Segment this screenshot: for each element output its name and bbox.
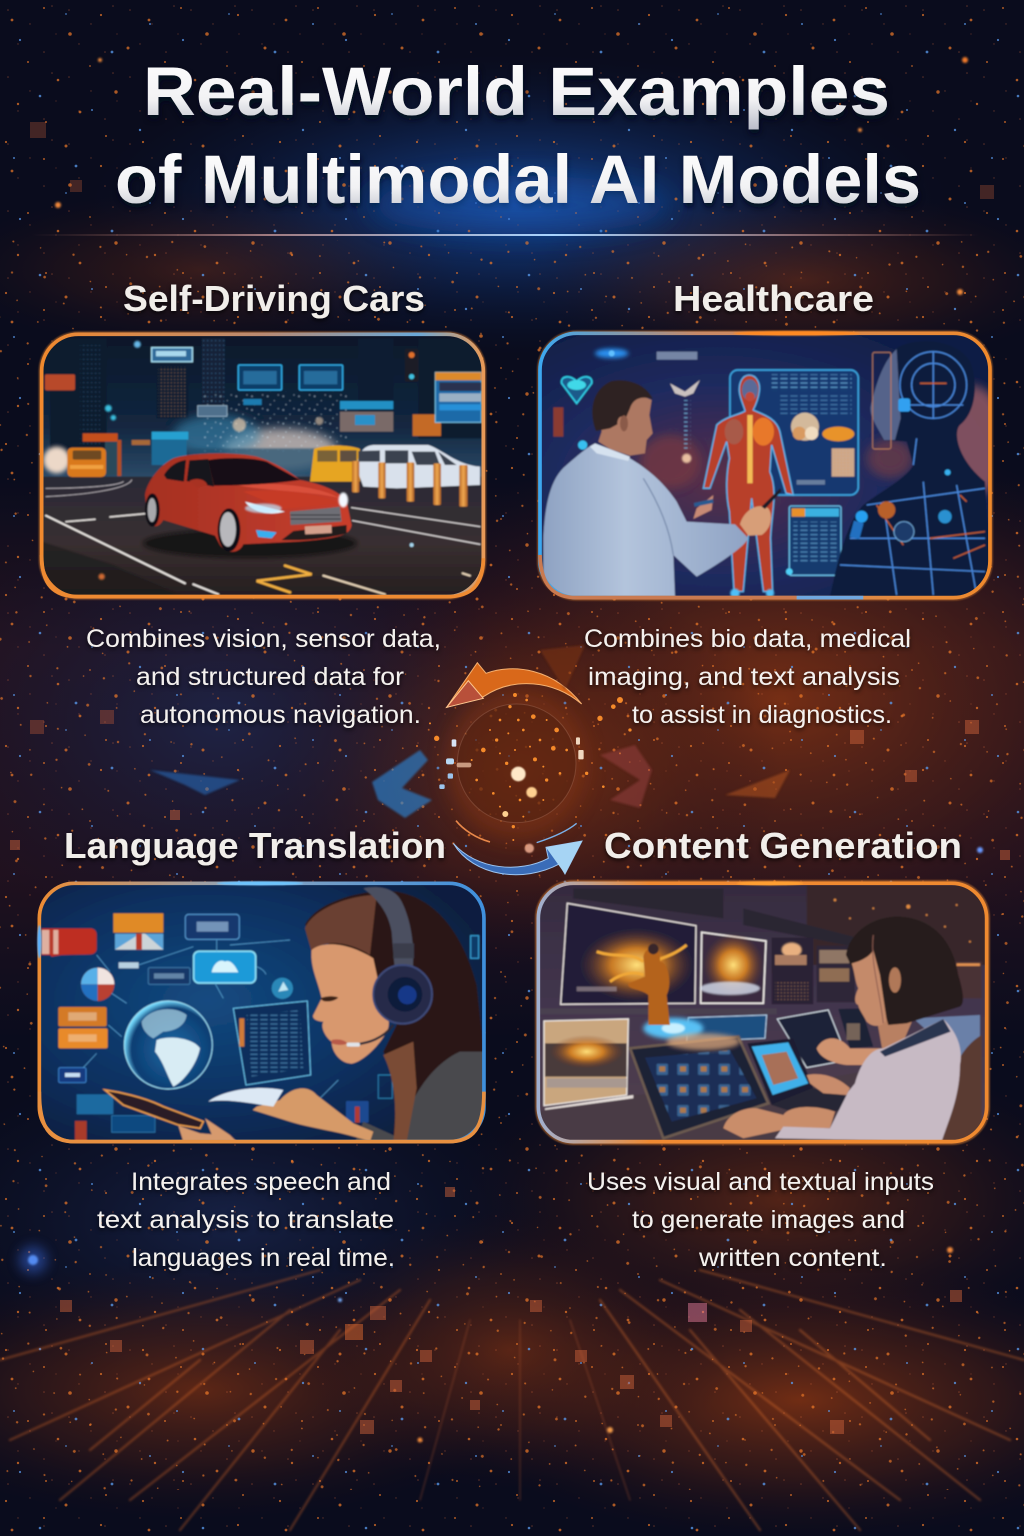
title: [115, 53, 921, 231]
caption: language translation: text analysis to translate: [97, 1206, 394, 1234]
panel: healthcare: [537, 278, 1007, 729]
caption: self-driving cars: [86, 625, 441, 729]
caption: healthcare: Combines bio data, medical: [584, 625, 911, 653]
heading: healthcare: Healthcare: [673, 278, 874, 319]
panel: content generation: [537, 825, 990, 1272]
caption: self-driving cars: and structured data for: [136, 663, 404, 691]
heading: language translation: Language Translation: [64, 825, 446, 866]
arrow: blue orbit: [453, 841, 582, 875]
title: of Multimodal AI Models: [115, 141, 921, 218]
caption: healthcare: imaging, and text analysis: [588, 663, 900, 691]
panel: language translation: [37, 825, 487, 1272]
caption: content generation: Uses visual and textual inputs: [587, 1168, 934, 1196]
illustration: red car on a city street: [40, 332, 487, 598]
caption: language translation: languages in real time.: [132, 1244, 395, 1272]
caption: self-driving cars: Combines vision, sensor data,: [86, 625, 441, 653]
heading: self-driving cars: Self-Driving Cars: [123, 278, 425, 319]
panel: self-driving cars: [40, 278, 487, 729]
caption: content generation: [587, 1168, 934, 1272]
caption: content generation: written content.: [698, 1244, 887, 1272]
title: Real-World Examples: [143, 53, 890, 130]
illustration: doctor, holographic body and android: [537, 331, 1007, 602]
decorative arrow shards: [150, 645, 790, 818]
caption: healthcare: [584, 625, 911, 729]
caption: self-driving cars: autonomous navigation.: [140, 701, 421, 729]
caption: content generation: to generate images and: [632, 1206, 905, 1234]
heading: content generation: Content Generation: [604, 825, 962, 866]
caption: language translation: Integrates speech and: [131, 1168, 391, 1196]
caption: language translation: [97, 1168, 395, 1272]
arrow: orange orbit: [447, 663, 582, 707]
illustration: translator with headset and globe: [37, 881, 487, 1147]
caption: healthcare: to assist in diagnostics.: [632, 701, 892, 729]
illustration: creator at screens and tablets: [537, 881, 990, 1145]
central hub: orbit arrows and particle sphere: [429, 663, 632, 875]
